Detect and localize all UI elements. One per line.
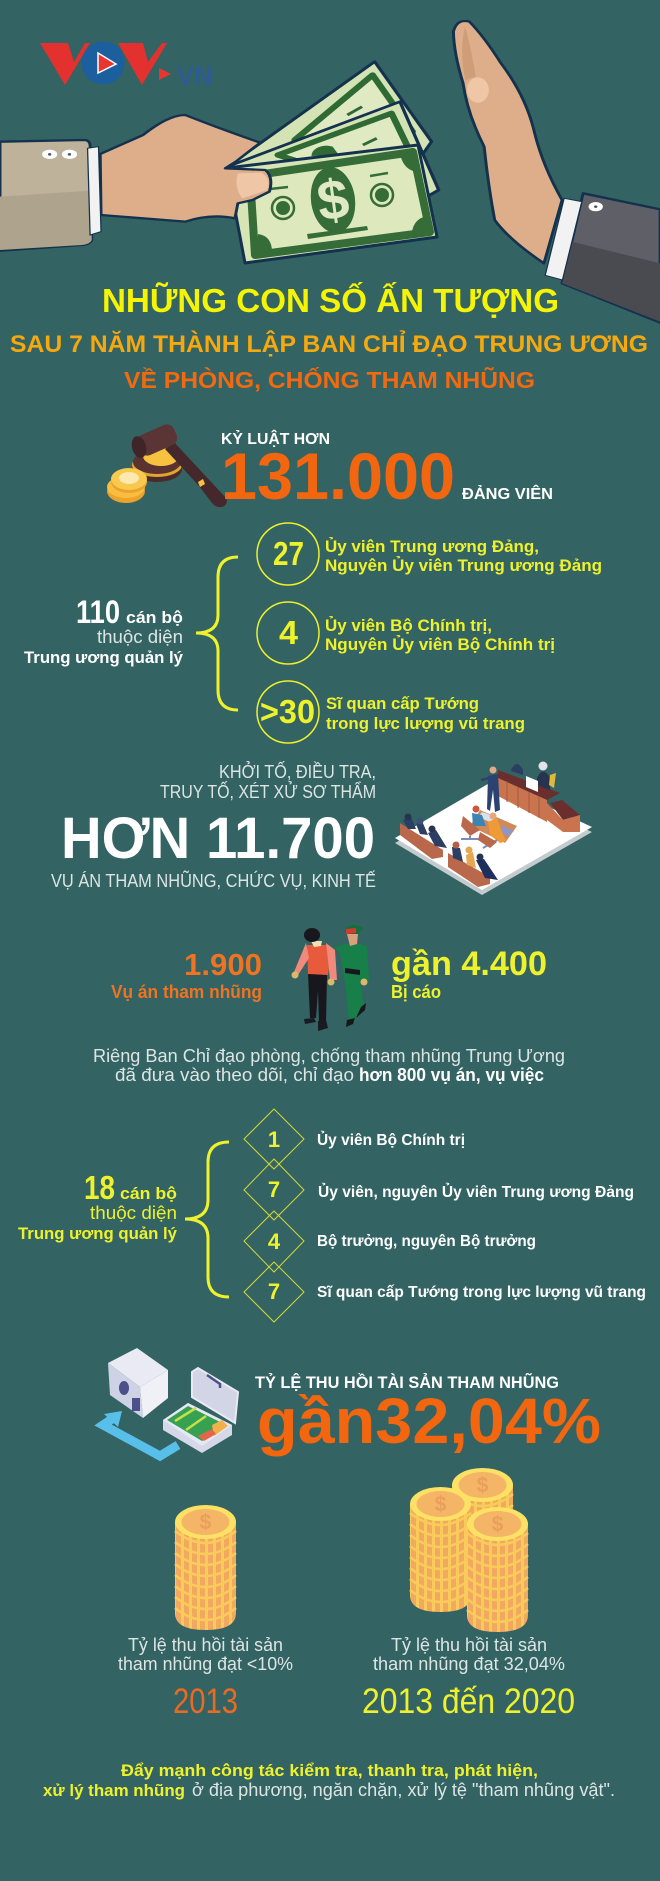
stat: 11.700 cases: VỤ ÁN THAM NHŨNG, CHỨC VỤ, KINH TẾ xyxy=(51,870,376,891)
stat: asset recovery rate: gần32,04% xyxy=(257,1385,601,1457)
text: steering committee note: Riêng Ban Chỉ đạo phòng, chống tham nhũng Trung Ương xyxy=(93,1046,565,1066)
stat: 131.000 party members xyxy=(221,429,553,513)
left sleeve xyxy=(0,140,92,251)
text: 2013 to 2020 recovery xyxy=(362,1635,575,1721)
text: steering committee note xyxy=(93,1046,565,1085)
stat: 11.700 cases: KHỞI TỐ, ĐIỀU TRA, xyxy=(219,761,376,782)
text: 2013 to 2020 recovery: tham nhũng đạt 32,04% xyxy=(373,1654,565,1674)
item: 1 Politburo member: Ủy viên Bộ Chính trị xyxy=(317,1130,465,1149)
text: 110 officials: Trung ương quản lý xyxy=(24,648,184,667)
icon: safe, briefcase and arrow xyxy=(103,1348,238,1456)
stat: 11.700 cases: HƠN 11.700 xyxy=(61,806,375,871)
item: 7 generals: Sĩ quan cấp Tướng trong lực lượng vũ trang xyxy=(317,1284,646,1301)
item: 7 Central Committee members: 7 xyxy=(268,1177,280,1202)
icon: courtroom xyxy=(395,762,592,895)
stat: nearly 4.400 defendants: Bị cáo xyxy=(391,982,441,1002)
item: 1 Politburo member xyxy=(244,1109,465,1169)
left hand xyxy=(100,115,271,222)
stat: 11.700 cases: TRUY TỐ, XÉT XỬ SƠ THẨM xyxy=(160,781,376,802)
text: 18 officials xyxy=(18,1169,178,1243)
text: 110 officials: thuộc diện xyxy=(97,627,183,647)
stat: nearly 4.400 defendants: gần 4.400 xyxy=(391,945,547,983)
item: >30: >30 xyxy=(260,693,315,730)
title: SAU 7 NĂM THÀNH LẬP BAN CHỈ ĐẠO TRUNG ƯƠNG xyxy=(10,329,648,358)
item: 4 ministers: Bộ trưởng, nguyên Bộ trưởng xyxy=(317,1233,536,1250)
logo: VOV.VN: VN xyxy=(177,61,213,91)
text: 18 officials: Trung ương quản lý xyxy=(18,1224,178,1243)
stat: 11.700 cases xyxy=(51,761,376,891)
text: 110 officials: cán bộ xyxy=(126,608,183,627)
item: >30: Sĩ quan cấp Tướng xyxy=(326,694,479,713)
stat: 131.000 party members: 131.000 xyxy=(221,439,455,513)
title: VỀ PHÒNG, CHỐNG THAM NHŨNG xyxy=(124,366,535,393)
item: 7 Central Committee members xyxy=(244,1159,634,1220)
text: closing statement: ở địa phương, ngăn chặn, xử lý tệ "tham nhũng vật". xyxy=(192,1780,615,1800)
item: 27 xyxy=(257,523,602,585)
illustration: hand offering money xyxy=(0,115,271,251)
text: closing statement: Đẩy mạnh công tác kiểm tra, thanh tra, phát hiện, xyxy=(121,1761,538,1780)
text: 2013 recovery xyxy=(118,1635,293,1721)
stat: 1.900 corruption cases: 1.900 xyxy=(184,947,262,982)
text: closing statement: xử lý tham nhũng xyxy=(43,1781,185,1800)
icon: three coin stacks xyxy=(410,1468,528,1632)
item: 27: Nguyên Ủy viên Trung ương Đảng xyxy=(325,556,602,575)
title: NHỮNG CON SỐ ẤN TƯỢNG xyxy=(102,281,559,319)
stat: 131.000 party members: ĐẢNG VIÊN xyxy=(462,484,553,503)
text: 2013 to 2020 recovery: Tỷ lệ thu hồi tài sản xyxy=(391,1635,547,1655)
item: 4: 4 xyxy=(279,614,299,651)
icon: defendant and soldier xyxy=(292,925,369,1031)
item: 4 xyxy=(257,602,555,664)
text: 2013 to 2020 recovery: 2013 đến 2020 xyxy=(362,1682,575,1721)
text: 18 officials: cán bộ xyxy=(120,1184,177,1203)
icon: front banknote xyxy=(227,145,437,263)
title xyxy=(10,281,648,393)
item: 27: 27 xyxy=(273,535,304,572)
item: 4: Ủy viên Bộ Chính trị, xyxy=(325,616,492,635)
text: 2013 recovery: tham nhũng đạt <10% xyxy=(118,1654,293,1674)
text: 2013 recovery: Tỷ lệ thu hồi tài sản xyxy=(128,1635,283,1655)
illustration: refusing hand xyxy=(453,21,660,323)
text: steering committee note: đã đưa vào theo dõi, chỉ đạo xyxy=(115,1065,354,1085)
item: >30: trong lực lượng vũ trang xyxy=(326,714,525,733)
icon: single coin stack xyxy=(175,1505,236,1630)
stat: 1.900 corruption cases xyxy=(111,947,262,1002)
item: >30 xyxy=(257,681,525,743)
text: steering committee note: hơn 800 vụ án, vụ việc xyxy=(359,1065,544,1085)
brace: 18 officials xyxy=(185,1142,229,1297)
item: 4: Nguyên Ủy viên Bộ Chính trị xyxy=(325,635,555,654)
icon: front banknote: $ xyxy=(313,166,353,233)
text: 110 officials: 110 xyxy=(76,594,120,630)
item: 7 generals xyxy=(244,1262,646,1322)
brace: 110 officials xyxy=(196,557,238,710)
item: 1 Politburo member: 1 xyxy=(268,1127,280,1152)
stat: asset recovery rate: TỶ LỆ THU HỒI TÀI SẢN THAM NHŨNG xyxy=(255,1372,559,1392)
icon: back banknotes xyxy=(227,62,439,200)
item: 7 generals: 7 xyxy=(268,1279,280,1304)
item: 4 ministers: 4 xyxy=(268,1229,281,1254)
text: 2013 recovery: 2013 xyxy=(173,1682,238,1721)
text: 110 officials xyxy=(24,594,184,667)
text: 18 officials: thuộc diện xyxy=(90,1203,177,1223)
stat: 1.900 corruption cases: Vụ án tham nhũng xyxy=(111,982,262,1002)
item: 4 ministers xyxy=(244,1211,536,1272)
text: closing statement xyxy=(43,1761,615,1800)
item: 27: Ủy viên Trung ương Đảng, xyxy=(325,537,539,556)
logo: VOV.VN xyxy=(40,42,213,91)
item: 7 Central Committee members: Ủy viên, nguyên Ủy viên Trung ương Đảng xyxy=(318,1182,634,1201)
stat: 131.000 party members: KỶ LUẬT HƠN xyxy=(221,429,330,448)
text: 18 officials: 18 xyxy=(84,1169,115,1206)
icon: gavel and coins xyxy=(107,422,227,507)
stat: nearly 4.400 defendants xyxy=(391,945,547,1002)
